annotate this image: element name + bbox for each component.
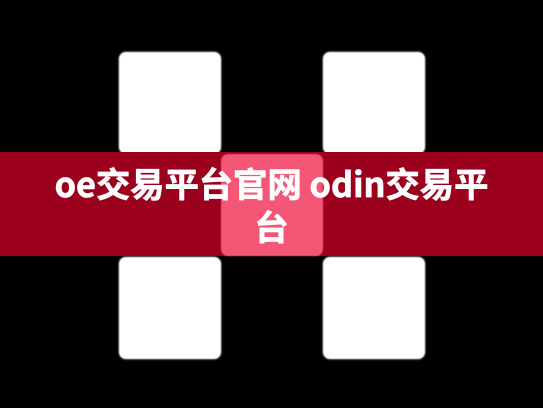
tile: center pink bbox=[221, 154, 323, 256]
tile: bottom right bbox=[323, 257, 425, 359]
title band bbox=[0, 152, 543, 256]
tile: bottom left bbox=[119, 257, 221, 359]
title: oe交易平台官网 odin交易平台 bbox=[55, 157, 488, 250]
tile: top left bbox=[119, 52, 221, 154]
tile: top right bbox=[323, 52, 425, 154]
